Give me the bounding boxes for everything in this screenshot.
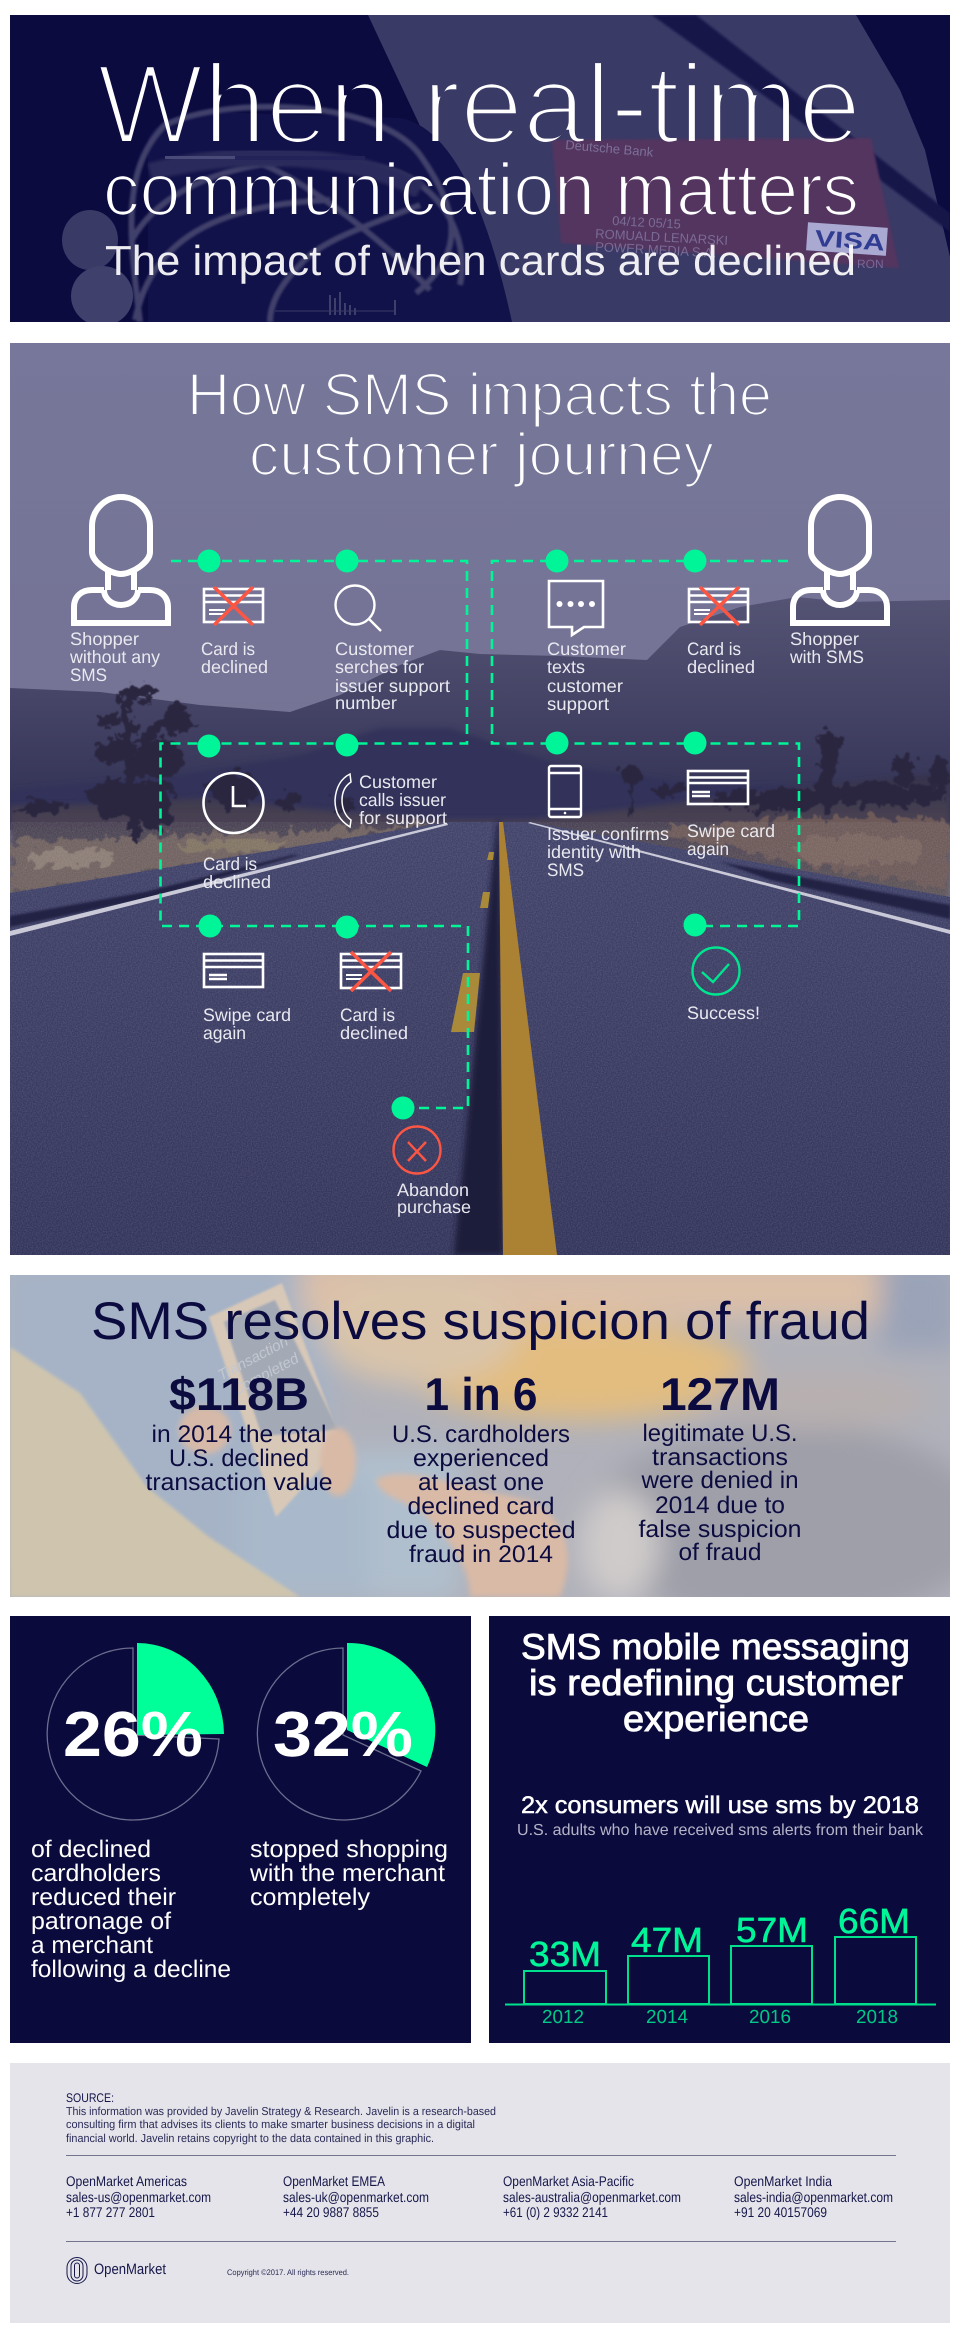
text: shopper with SMS: with SMS (789, 647, 864, 667)
text: 26% description: following a decline (31, 1956, 231, 1983)
text: abandon purchase (397, 1180, 471, 1217)
contact: Asia-Pacific (503, 2173, 681, 2220)
icon: clock (204, 773, 264, 833)
stat: 127M: transactions (652, 1444, 788, 1471)
growth heading: is redefining customer (529, 1662, 903, 1703)
text: issuer confirms: Issuer confirms (547, 824, 669, 844)
contact: Americas: OpenMarket Americas (66, 2173, 187, 2189)
text: card declined 3: Card is (203, 854, 257, 874)
text: card declined 4 (340, 1005, 408, 1043)
icon: shopper without SMS (74, 497, 168, 623)
stat: 127M: of fraud (678, 1539, 762, 1566)
source text: This information was provided by Javelin Strategy & Research. Javelin is a research-based (66, 2106, 496, 2118)
icon: success check (692, 948, 740, 994)
contact: EMEA: +44 20 9887 8855 (283, 2204, 379, 2220)
text: 26% description (31, 1836, 231, 1983)
stat: 1 in 6: 1 in 6 (424, 1368, 538, 1420)
text: 32% description: completely (250, 1884, 370, 1911)
stat: 127M (638, 1368, 802, 1566)
icon: declined card 1 (204, 587, 263, 625)
contact: Americas: sales-us@openmarket.com (66, 2189, 211, 2205)
contact: EMEA (283, 2173, 429, 2220)
contact: EMEA: sales-uk@openmarket.com (283, 2189, 429, 2205)
text: card declined 2 (687, 639, 755, 677)
journey background photo (10, 343, 952, 1255)
source text: consulting firm that advises its clients to make smarter business decisions in a digital (66, 2119, 475, 2131)
pie chart: 26%: 26% (63, 1698, 203, 1770)
header background photo: 04/12 05/15 (612, 213, 681, 232)
stat: 1 in 6: U.S. cardholders (392, 1421, 570, 1448)
text: 26% description: cardholders (31, 1860, 161, 1887)
panel: customer journey (10, 343, 952, 1255)
text: 32% description (249, 1836, 448, 1911)
stat: $118B: in 2014 the total (152, 1421, 326, 1448)
text: customer texts support: Customer (547, 639, 626, 659)
contact: India: OpenMarket India (734, 2173, 832, 2189)
title (97, 41, 861, 284)
fraud background photo (10, 1275, 950, 1597)
copyright: Copyright ©2017. All rights reserved. (227, 2268, 349, 2277)
bar chart (505, 1902, 936, 2028)
text: customer texts support: customer (547, 676, 623, 696)
icon: magnifier (336, 586, 381, 631)
text: shopper with SMS (789, 629, 864, 667)
icon: chat bubble (549, 581, 603, 635)
bar chart: 47M (631, 1921, 703, 1960)
title: When real-time (97, 41, 861, 167)
text: abandon purchase: Abandon (397, 1180, 469, 1200)
text: card declined 1: declined (201, 657, 268, 677)
text: shopper with SMS: Shopper (790, 629, 859, 649)
text: issuer confirms: identity with (547, 842, 641, 862)
source text (66, 2091, 496, 2145)
text: issuer confirms (547, 824, 669, 880)
stat: 127M: false suspicion (638, 1516, 802, 1543)
text: 32% description: with the merchant (249, 1860, 445, 1887)
stat: 1 in 6: due to suspected (386, 1517, 576, 1544)
stat: $118B: $118B (169, 1368, 309, 1420)
fraud background photo: Completed (230, 1350, 302, 1399)
contact: Asia-Pacific: +61 (0) 2 9332 2141 (503, 2204, 608, 2220)
text: customer searches: number (335, 693, 397, 713)
pie chart: 26% (47, 1643, 224, 1820)
bar chart: 2012 (542, 2007, 584, 2028)
bar chart: 33M (529, 1935, 601, 1974)
text: abandon purchase: purchase (397, 1197, 471, 1217)
text: customer texts support: texts (547, 657, 585, 677)
text: card declined 2: declined (687, 657, 755, 677)
header background photo (10, 15, 950, 326)
contact: Asia-Pacific: OpenMarket Asia-Pacific (503, 2173, 634, 2189)
text: shopper without SMS: SMS (70, 665, 107, 685)
stat: 127M: 127M (660, 1368, 780, 1420)
text: customer calls issuer: Customer (359, 772, 437, 792)
text: customer texts support (547, 639, 626, 714)
stat: 127M: were denied in (640, 1467, 798, 1494)
bar chart: 2018 (856, 2007, 898, 2028)
text: issuer confirms: SMS (547, 860, 584, 880)
text: customer searches: issuer support (335, 676, 450, 696)
contact: India: sales-india@openmarket.com (734, 2189, 893, 2205)
text: swipe card right: Swipe card (687, 821, 775, 841)
text: card declined 1: Card is (201, 639, 255, 659)
growth heading (521, 1626, 910, 1739)
journey heading: How SMS impacts the (187, 361, 772, 428)
title: communication matters (103, 148, 859, 231)
bar chart: 66M (838, 1902, 910, 1941)
header background photo: RON (857, 257, 884, 271)
chart subtitle: U.S. adults who have received sms alerts from their bank (517, 1822, 924, 1839)
fraud heading: SMS resolves suspicion of fraud (91, 1292, 870, 1351)
journey step dots (198, 550, 706, 1120)
icon: shopper with SMS (793, 497, 887, 623)
text: customer texts support: support (547, 694, 609, 714)
journey heading: customer journey (249, 421, 714, 488)
text: customer calls issuer (359, 772, 447, 828)
dashed connector: without SMS path (160, 561, 468, 1108)
icon: telephone handset (335, 774, 351, 827)
panel: SMS growth (489, 1616, 950, 2043)
bar chart: 57M (736, 1911, 808, 1950)
text: swipe card left (203, 1005, 291, 1043)
text: 26% description: patronage of (31, 1908, 171, 1935)
panel: pie charts (10, 1616, 471, 2043)
text: swipe card left: Swipe card (203, 1005, 291, 1025)
icon: mobile phone (549, 766, 581, 817)
contact: India (734, 2173, 893, 2220)
header background photo: POWER MEDIA S.A. (595, 239, 717, 260)
bar chart: 2016 (749, 2007, 791, 2028)
panel: footer (10, 2063, 950, 2323)
text: card declined 3 (203, 854, 271, 892)
text: success: Success! (687, 1003, 760, 1023)
header background photo: Deutsche Bank (565, 137, 654, 160)
stat: 1 in 6: fraud in 2014 (409, 1541, 553, 1568)
stat: 127M: legitimate U.S. (642, 1420, 798, 1447)
text: 26% description: a merchant (31, 1932, 153, 1959)
icon: abandon cross (394, 1126, 440, 1174)
bar chart: 2014 (646, 2007, 688, 2028)
text: card declined 2: Card is (687, 639, 741, 659)
growth heading: SMS mobile messaging (521, 1626, 910, 1667)
stat: 1 in 6: experienced (413, 1445, 549, 1472)
text: customer calls issuer: calls issuer (359, 790, 446, 810)
panel: header (10, 15, 950, 326)
stat: 1 in 6: at least one (418, 1469, 544, 1496)
text: shopper without SMS: without any (69, 647, 160, 667)
text: card declined 4: Card is (340, 1005, 395, 1025)
text: swipe card right: again (687, 839, 729, 859)
source text: SOURCE: (66, 2091, 114, 2105)
text: 26% description: reduced their (31, 1884, 176, 1911)
contact: Asia-Pacific: sales-australia@openmarket.com (503, 2189, 681, 2205)
dashed connector: with SMS path (492, 561, 799, 926)
pie chart: 32% (257, 1643, 435, 1820)
stat: $118B: U.S. declined (169, 1445, 309, 1472)
growth heading: experience (623, 1698, 809, 1739)
text: card declined 1 (201, 639, 268, 677)
source text: financial world. Javelin retains copyright to the data contained in this graphic. (66, 2133, 434, 2145)
stat: 1 in 6: declined card (408, 1493, 554, 1520)
text: swipe card right (687, 821, 775, 859)
stat: 1 in 6 (386, 1368, 576, 1568)
stat: $118B (146, 1368, 332, 1496)
text: 26% description: of declined (31, 1836, 151, 1863)
contact: EMEA: OpenMarket EMEA (283, 2173, 386, 2189)
text: customer searches (335, 639, 450, 713)
text: customer calls issuer: for support (359, 808, 447, 828)
chart subtitle: 2x consumers will use sms by 2018 (521, 1792, 919, 1819)
contact: Americas (66, 2173, 211, 2220)
text: 32% description: stopped shopping (250, 1836, 448, 1863)
chart subtitle (517, 1792, 924, 1839)
panel: fraud statistics (10, 1275, 950, 1597)
icon: declined card 3 (341, 952, 401, 991)
icon: declined card 2 (689, 587, 748, 625)
header background photo: VISA (814, 225, 886, 256)
header background photo: ROMUALD LENARSKI (595, 226, 728, 248)
icon: swipe card right (688, 771, 748, 804)
contact: Americas: +1 877 277 2801 (66, 2204, 155, 2220)
contact: India: +91 20 40157069 (734, 2204, 827, 2220)
pie chart: 32%: 32% (273, 1698, 413, 1770)
stat: 127M: 2014 due to (655, 1492, 785, 1519)
icon: swipe card left (204, 954, 263, 987)
logo: OpenMarket: OpenMarket (94, 2261, 167, 2278)
title: The impact of when cards are declined (105, 237, 856, 284)
text: customer searches: serches for (335, 657, 424, 677)
logo: OpenMarket (67, 2258, 167, 2284)
text: card declined 3: declined (203, 872, 271, 892)
text: shopper without SMS (69, 629, 160, 685)
text: customer searches: Customer (335, 639, 414, 659)
text: card declined 4: declined (340, 1023, 408, 1043)
text: shopper without SMS: Shopper (70, 629, 139, 649)
stat: $118B: transaction value (146, 1469, 332, 1496)
fraud background photo: Transaction (215, 1333, 291, 1384)
text: swipe card left: again (203, 1023, 246, 1043)
journey heading (187, 361, 772, 488)
